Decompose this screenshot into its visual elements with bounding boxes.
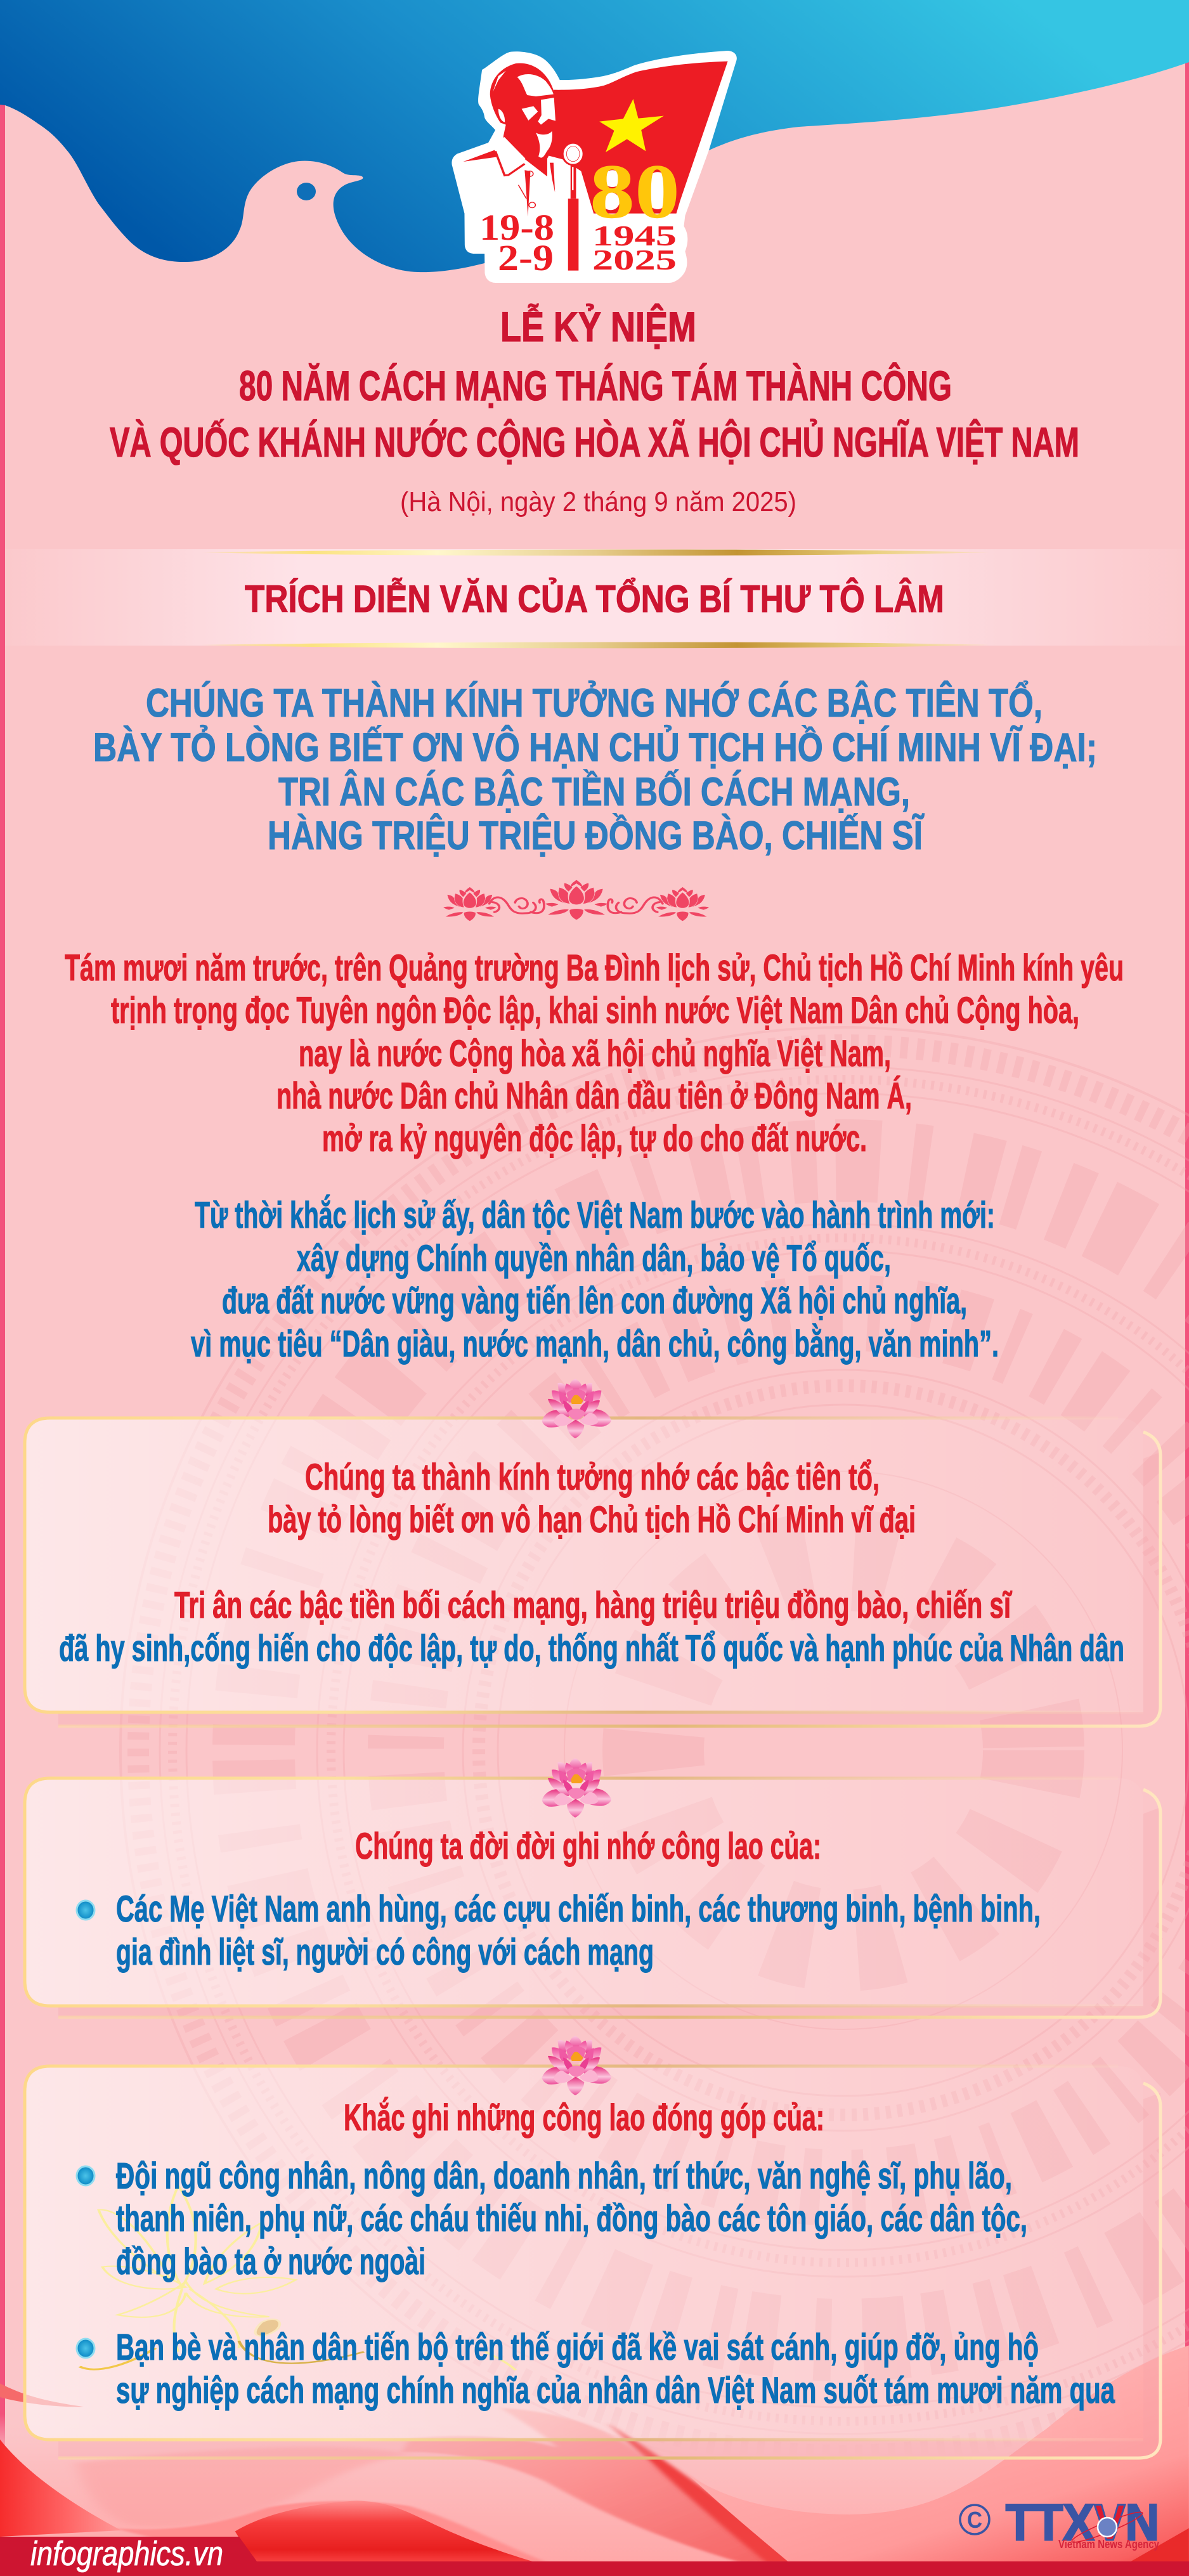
panel: remembering merits card bbox=[25, 1758, 1160, 2017]
bronze drum pattern background bbox=[120, 1027, 1189, 2473]
blue paragraph bbox=[191, 1195, 999, 1365]
red paragraph bbox=[65, 947, 1124, 1159]
infographics.vn tag: infographics.vn bbox=[30, 2535, 223, 2573]
blue heading quote: HÀNG TRIỆU TRIỆU ĐỒNG BÀO, CHIẾN SĨ bbox=[268, 813, 925, 858]
red paragraph: mở ra kỷ nguyên độc lập, tự do cho đất nước. bbox=[322, 1118, 867, 1159]
left edge stripe bbox=[0, 101, 5, 2448]
80th anniversary logo: 2025 bbox=[592, 244, 677, 276]
bottom bar bbox=[0, 2561, 1189, 2576]
date line: (Hà Nội, ngày 2 tháng 9 năm 2025) bbox=[400, 486, 796, 517]
80th anniversary logo: 80 bbox=[590, 148, 680, 235]
red silk ribbon background bbox=[0, 2345, 1189, 2562]
blue sky with dove shape bbox=[0, 0, 1189, 272]
80th anniversary logo: 2-9 bbox=[498, 237, 554, 278]
gold flower outline bbox=[80, 2186, 516, 2371]
red paragraph: nay là nước Cộng hòa xã hội chủ nghĩa Việt Nam, bbox=[299, 1033, 891, 1074]
panel: contributions card: Khắc ghi những công lao đóng góp của: bbox=[344, 2097, 824, 2138]
panel: tribute card: bày tỏ lòng biết ơn vô hạn Chủ tịch Hồ Chí Minh vĩ đại bbox=[268, 1499, 916, 1540]
right edge stripe bbox=[1185, 60, 1189, 2407]
blue heading quote: TRI ÂN CÁC BẬC TIỀN BỐI CÁCH MẠNG, bbox=[278, 769, 910, 814]
blue paragraph: xây dựng Chính quyền nhân dân, bảo vệ Tổ quốc, bbox=[297, 1238, 891, 1279]
title bbox=[110, 303, 1079, 465]
icon: bullet bbox=[77, 2339, 94, 2358]
speech excerpt banner: TRÍCH DIỄN VĂN CỦA TỔNG BÍ THƯ TÔ LÂM bbox=[245, 578, 944, 620]
TTXVN logo: Vietnam News Agency bbox=[1058, 2538, 1159, 2551]
lotus ornament divider bbox=[443, 880, 709, 921]
panel: contributions card bbox=[25, 2036, 1160, 2458]
title: LỄ KỶ NIỆM bbox=[500, 303, 696, 350]
80th anniversary logo bbox=[452, 51, 737, 283]
panel: contributions card: đồng bào ta ở nước ngoài bbox=[116, 2241, 426, 2282]
panel: tribute card bbox=[25, 1379, 1160, 1726]
icon: lotus bbox=[542, 1758, 611, 1818]
icon: lotus bbox=[542, 1379, 611, 1438]
blue heading quote bbox=[93, 680, 1097, 858]
icon: bullet bbox=[77, 2166, 94, 2185]
icon: lotus bbox=[542, 2036, 611, 2095]
TTXVN logo: TTXVN bbox=[1006, 2494, 1159, 2551]
red paragraph: nhà nước Dân chủ Nhân dân đầu tiên ở Đông Nam Á, bbox=[276, 1076, 912, 1117]
TTXVN logo: C bbox=[967, 2507, 982, 2533]
dove eye bbox=[297, 183, 316, 200]
80th anniversary logo: 1945 bbox=[592, 219, 677, 252]
80th anniversary logo: 19-8 bbox=[479, 207, 554, 248]
panel: tribute card: Chúng ta thành kính tưởng nhớ các bậc tiên tổ, bbox=[305, 1457, 880, 1498]
panel: remembering merits card: gia đình liệt sĩ, người có công với cách mạng bbox=[116, 1932, 654, 1973]
panel: remembering merits card: Chúng ta đời đời ghi nhớ công lao của: bbox=[355, 1826, 821, 1867]
icon: bullet bbox=[77, 1901, 94, 1920]
speech excerpt banner bbox=[5, 549, 1185, 648]
